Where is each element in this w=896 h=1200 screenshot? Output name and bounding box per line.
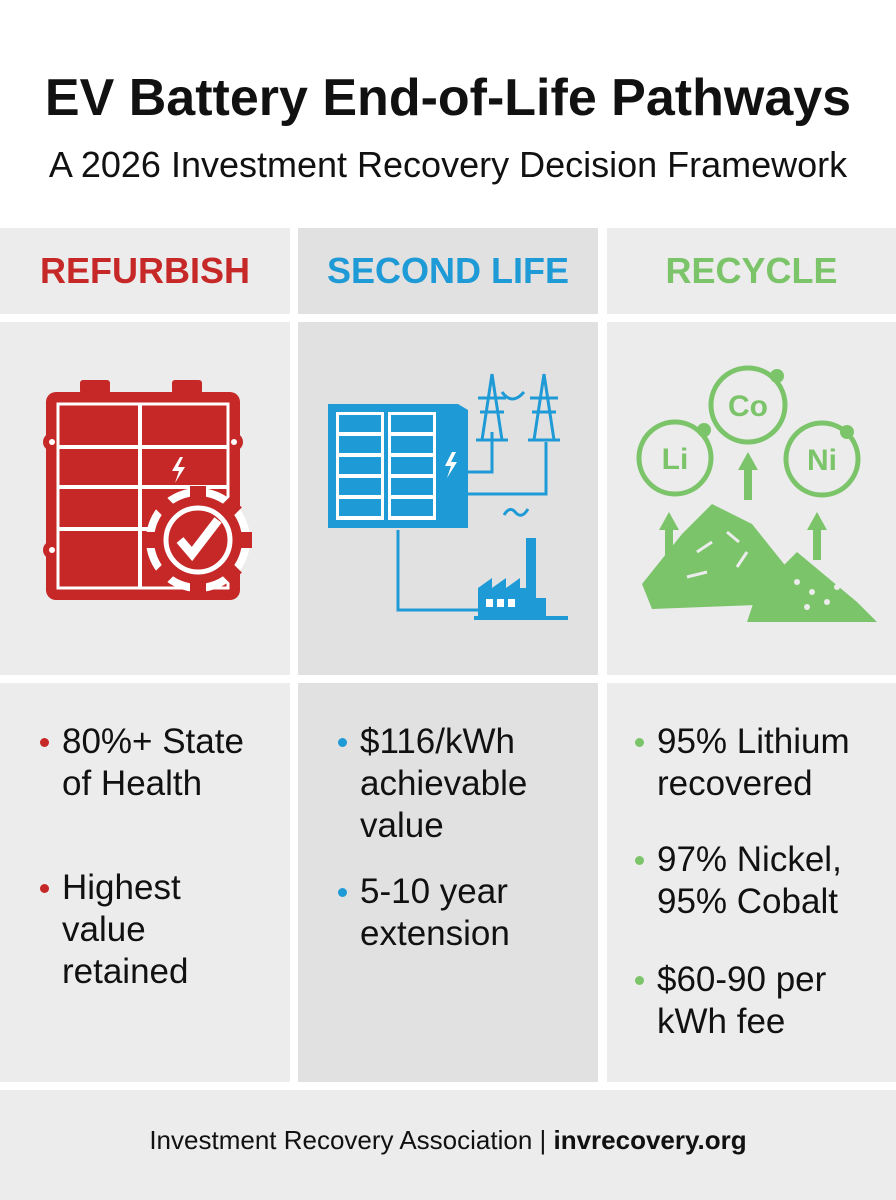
subtitle: A 2026 Investment Recovery Decision Framework xyxy=(49,144,847,185)
header: second life: SECOND LIFE xyxy=(327,250,569,291)
bullet: value per kWh xyxy=(338,722,527,845)
bullet: value per kWh: achievable xyxy=(360,764,527,803)
bullet: lithium: 95% Lithium xyxy=(657,722,850,761)
icon: storage rack, grid towers and factory xyxy=(328,374,568,620)
bullet: extension: 5-10 year xyxy=(360,872,508,911)
panel: recycle icon xyxy=(607,322,896,675)
bullet: lithium: recovered xyxy=(657,764,813,803)
panel: recycle facts xyxy=(607,683,896,1082)
header: recycle: RECYCLE xyxy=(665,250,838,291)
panel: second life facts xyxy=(298,683,598,1082)
bullet: fee xyxy=(635,960,826,1041)
bullet: highest value: value xyxy=(62,910,146,949)
icon: elements and recycled material xyxy=(636,366,877,622)
icon: elements and recycled material: Co xyxy=(728,390,768,423)
bullet: lithium xyxy=(635,722,850,803)
header: refurbish xyxy=(0,228,290,314)
title: EV Battery End-of-Life Pathways xyxy=(45,69,851,127)
bullet: fee: kWh fee xyxy=(657,1002,785,1041)
bullet: nickel cobalt: 95% Cobalt xyxy=(657,882,838,921)
bullet: extension xyxy=(338,872,510,953)
bullet: highest value: Highest xyxy=(62,868,181,907)
bullet: extension: extension xyxy=(360,914,510,953)
bullet: state of health: 80%+ State xyxy=(62,722,244,761)
icon: elements and recycled material: Li xyxy=(662,443,688,476)
header: refurbish: REFURBISH xyxy=(40,250,250,291)
footer xyxy=(0,1090,896,1200)
bullet: nickel cobalt xyxy=(635,840,842,921)
bullet: nickel cobalt: 97% Nickel, xyxy=(657,840,842,879)
bullet: highest value xyxy=(40,868,188,991)
panel: second life icon xyxy=(298,322,598,675)
header: recycle xyxy=(607,228,896,314)
bullet: fee: $60-90 per xyxy=(657,960,826,999)
bullet: value per kWh: $116/kWh xyxy=(360,722,515,761)
panel: refurbish facts xyxy=(0,683,290,1082)
footer: Investment Recovery Association | invrecovery.org xyxy=(149,1125,747,1155)
bullet: value per kWh: value xyxy=(360,806,444,845)
bullet: highest value: retained xyxy=(62,952,188,991)
bullet: state of health: of Health xyxy=(62,764,202,803)
bullet: state of health xyxy=(40,722,244,803)
icon: elements and recycled material: Ni xyxy=(807,444,837,477)
header: second life xyxy=(298,228,598,314)
icon: battery with gear check xyxy=(43,380,252,600)
panel: refurbish icon xyxy=(0,322,290,675)
